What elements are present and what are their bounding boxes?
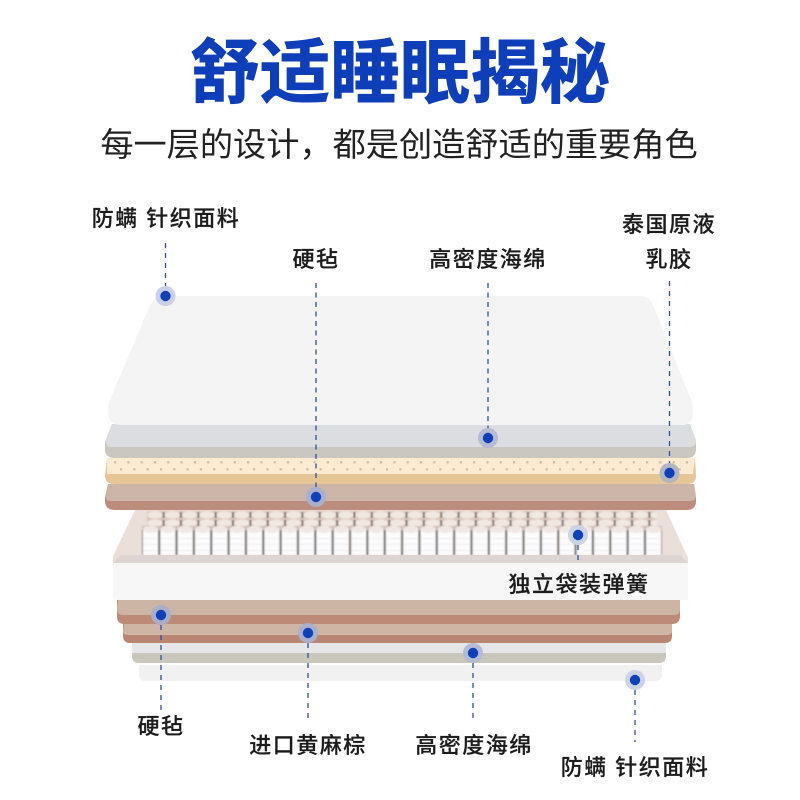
title: 舒适睡眠揭秘 [190,34,610,112]
tray interior [113,510,688,566]
callout: jute: 进口黄麻棕 [249,733,367,758]
layer: high-density foam (lower) [132,643,666,663]
callout: jute [249,623,367,758]
tray lip [113,555,688,563]
callout: high-density foam lower: 高密度海绵 [415,733,533,758]
layer: hard felt (upper) [105,484,696,510]
callout: high-density foam upper [429,247,547,448]
tray and pocket springs [113,510,688,600]
lower layers [117,600,680,681]
layer: latex [105,458,696,484]
callout: top knit fabric: 防螨 针织面料 [92,206,240,231]
callout: pocket springs: 独立袋装弹簧 [508,572,650,597]
spring rows [142,511,662,555]
callout: top knit fabric [92,206,240,306]
callout: Thai latex [622,212,716,483]
latex pores [114,462,692,469]
layer: bottom knit fabric [139,665,662,681]
callout: hard felt upper [292,247,340,507]
callout: hard felt lower: 硬毡 [137,714,185,739]
layer: jute [123,624,672,643]
callout: pocket springs [508,525,650,597]
callout: bottom knit fabric [561,670,709,780]
callout: high-density foam lower [415,643,533,758]
tray white band [113,563,688,600]
callout: Thai latex: 乳胶 [645,247,693,272]
mattress diagram [105,296,696,681]
layer: hard felt (lower) [117,600,680,624]
callout: hard felt upper: 硬毡 [292,247,340,272]
layer: top knit fabric [108,296,693,425]
subtitle: 每一层的设计，都是创造舒适的重要角色 [100,127,698,164]
callout: bottom knit fabric: 防螨 针织面料 [561,755,709,780]
callout: high-density foam upper: 高密度海绵 [429,247,547,272]
callout: Thai latex: 泰国原液 [622,212,716,237]
layer: high-density foam (upper) [105,424,696,458]
callout: hard felt lower [137,605,185,739]
